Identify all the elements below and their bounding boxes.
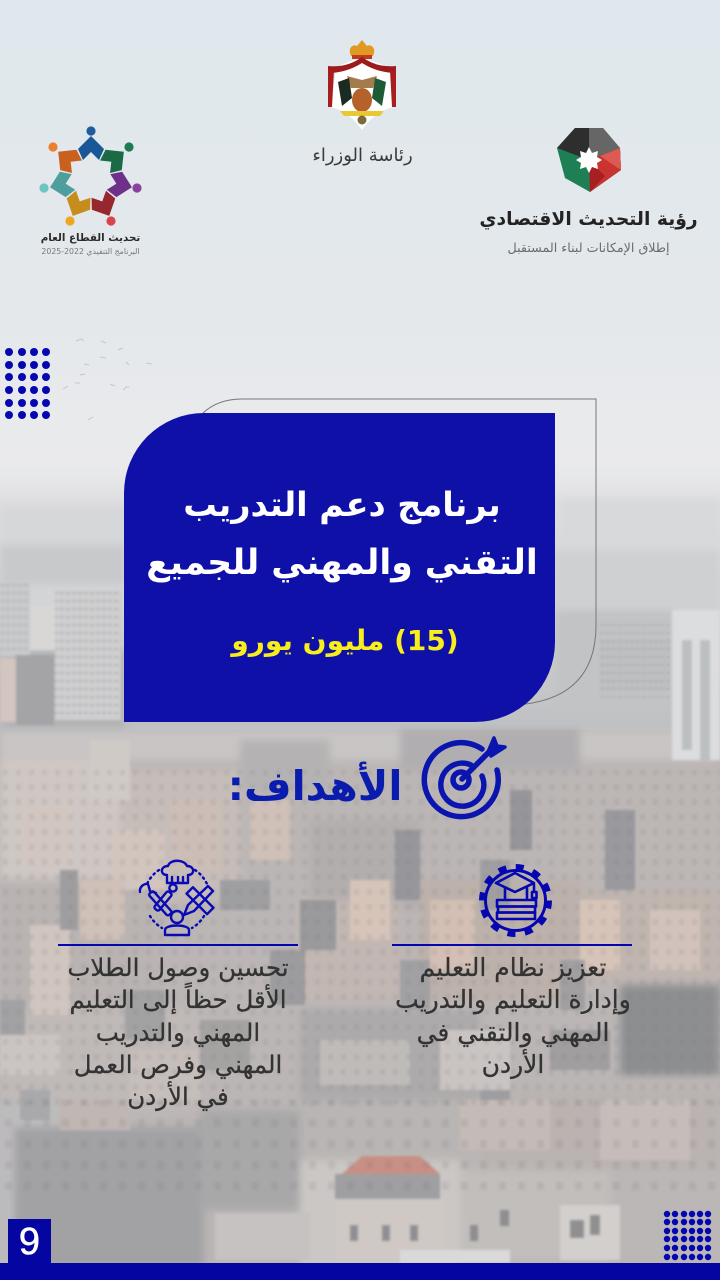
logo: economic modernisation vision [479,128,698,256]
decoration: top-left dot grid [5,348,50,419]
icon: ring of seven coloured figures [39,126,142,226]
text: prime ministry calligraphy: رئاسة الوزراء [312,145,413,166]
text: objective description: المهني والتدريب [96,1018,260,1047]
text: objective description: في الأردن [127,1082,229,1111]
icon: graduation cap and books in gear [479,864,552,937]
text: programme dates: البرنامج التنفيذي 2022-2025 [41,247,140,256]
text: budget: (15) مليون يورو [231,624,459,657]
text: objective description: وإدارة التعليم والتدريب [395,985,631,1014]
text: objective description: الأقل حظاً إلى التعليم [69,985,287,1014]
text: programme name: تحديث القطاع العام [41,232,140,244]
text: vision title: رؤية التحديث الاقتصادي [479,209,698,230]
text: objective description: المهني وفرص العمل [74,1050,282,1079]
text: programme title: التقني والمهني للجميع [146,543,538,583]
page number badge [8,1219,51,1263]
text: objective description [67,953,289,1112]
objective: TVET system (right) [392,864,632,1080]
text: programme title: برنامج دعم التدريب [183,485,501,524]
logo: Jordan coat of arms [312,40,413,166]
icon: chef hat, tools and person [138,860,215,936]
divider line [392,944,632,946]
text: objective description: المهني والتقني في [417,1018,609,1047]
objective: vocational access (left) [58,860,298,1112]
text: vision slogan: إطلاق الإمكانات لبناء المستقبل [508,240,670,255]
divider line [58,944,298,946]
panel outline [124,398,596,722]
decoration: bottom-right dot grid [664,1210,712,1260]
text: programme title [146,485,538,583]
text: objectives heading: الأهداف: [228,762,402,810]
heading: objectives with target icon [228,736,507,820]
text: objective description: الأردن [482,1050,544,1079]
logo: public sector modernisation [39,126,142,256]
text: objective description: تحسين وصول الطلاب [67,953,289,982]
page number badge: 9 [19,1221,40,1263]
panel: programme title [124,398,596,722]
icon: coat of arms [328,40,396,130]
text: objective description: تعزيز نظام التعليم [420,953,606,982]
icon: target with arrow [422,736,507,820]
icon: faceted Jordan flag emblem [557,128,621,192]
text: objective description [395,953,631,1080]
footer bar [0,1263,720,1280]
